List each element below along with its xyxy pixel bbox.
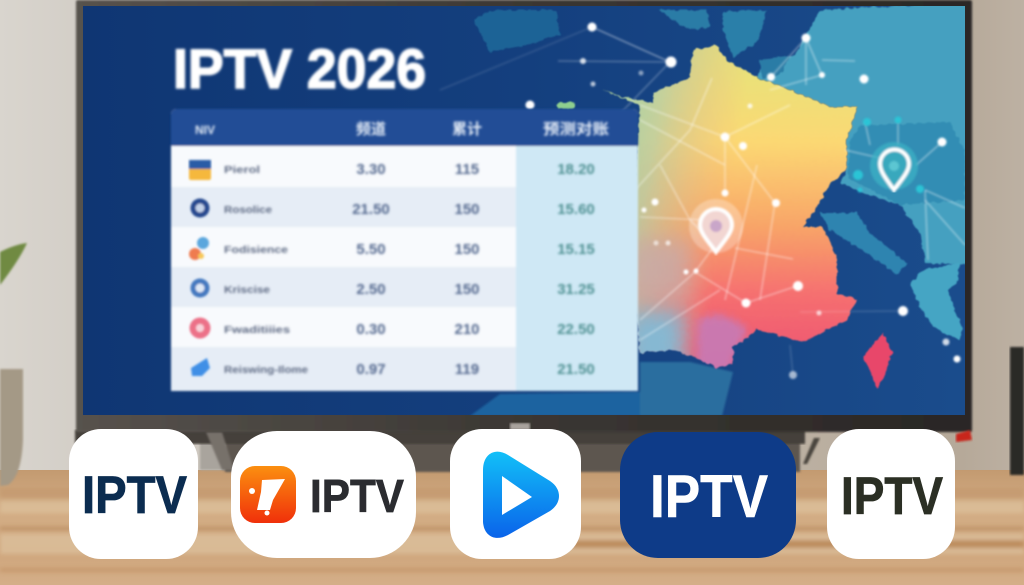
- table column: counts: 150: [454, 201, 480, 218]
- table column: counts: [454, 161, 480, 378]
- plant pot: [0, 369, 23, 486]
- data table: [171, 109, 638, 391]
- table column: counts: 150: [454, 241, 480, 258]
- map: france: [600, 40, 870, 380]
- table column: values: 0.30: [356, 321, 386, 338]
- table column: values: 2.50: [356, 281, 386, 298]
- dark object at right: [1010, 347, 1024, 475]
- table row names: Reiswing-Ilome: [224, 365, 308, 376]
- icon: orange cart: [240, 466, 296, 523]
- table header: 累计: [452, 121, 482, 138]
- badge 2: orange icon with IPTV: IPTV: [310, 470, 404, 522]
- table header: 频道: [356, 120, 386, 138]
- map pin: alps: [870, 142, 918, 190]
- screen title: IPTV 2026: [173, 37, 426, 100]
- table column: counts: 210: [454, 321, 480, 338]
- table row names: Fwaditiiies: [224, 325, 291, 336]
- table column: totals: 18.20: [557, 161, 595, 178]
- table row icons: [189, 160, 211, 376]
- table column: values: 0.97: [356, 361, 386, 378]
- map: nodes: [526, 22, 960, 379]
- table column: values: 21.50: [352, 201, 390, 218]
- table column: values: [352, 161, 390, 378]
- table column: totals: 22.50: [557, 321, 595, 338]
- map: brittany islet and corsica: [557, 102, 892, 388]
- table column: values: 5.50: [356, 241, 386, 258]
- table row names: Kriscise: [224, 285, 271, 296]
- table column: totals: [557, 161, 595, 378]
- table column: totals: 15.60: [557, 201, 595, 218]
- table column: totals: 21.50: [557, 361, 595, 378]
- table column: counts: 115: [455, 161, 479, 178]
- map: southern land: [470, 362, 733, 416]
- table column: totals: 15.15: [557, 241, 595, 258]
- tv screen: [83, 2, 970, 416]
- table header: 预测对账: [543, 120, 609, 138]
- table body: [171, 109, 638, 391]
- table column: counts: 119: [455, 361, 479, 378]
- icon: blue play: [483, 452, 559, 538]
- table column: values: 3.30: [356, 161, 386, 178]
- map pin: france: [689, 199, 743, 253]
- table header: [195, 120, 609, 138]
- table row names: Pierol: [224, 165, 260, 176]
- table column: counts: 150: [454, 281, 480, 298]
- badge 5: IPTV dark: [827, 429, 955, 559]
- map: teal nodes: [853, 116, 924, 193]
- plant leaf: [0, 243, 27, 285]
- table row names: [224, 165, 308, 376]
- tv power light: [956, 430, 972, 442]
- table column: totals: 31.25: [557, 281, 595, 298]
- table header: NIV: [195, 123, 215, 137]
- tv stand and under-tv shadow: [75, 430, 820, 472]
- badge 2: orange icon with IPTV: [231, 431, 416, 558]
- tv frame: [76, 0, 972, 432]
- badge 3: play button: [450, 429, 581, 559]
- table row names: Rosolice: [224, 205, 272, 216]
- potted plant: [0, 243, 27, 486]
- wooden table: [0, 470, 1024, 585]
- television: [76, 0, 972, 442]
- table row names: Fodisience: [224, 245, 289, 256]
- map: network lines: [440, 27, 965, 375]
- badge 4: IPTV blue: [620, 432, 796, 558]
- badge 4: IPTV blue: IPTV: [650, 463, 768, 530]
- map: neighbouring land: [474, 2, 970, 340]
- badge 1: IPTV navy: [69, 429, 198, 559]
- tv bottom detail: [510, 423, 530, 430]
- badge 1: IPTV navy: IPTV: [82, 466, 187, 525]
- badge 5: IPTV dark: IPTV: [841, 467, 943, 526]
